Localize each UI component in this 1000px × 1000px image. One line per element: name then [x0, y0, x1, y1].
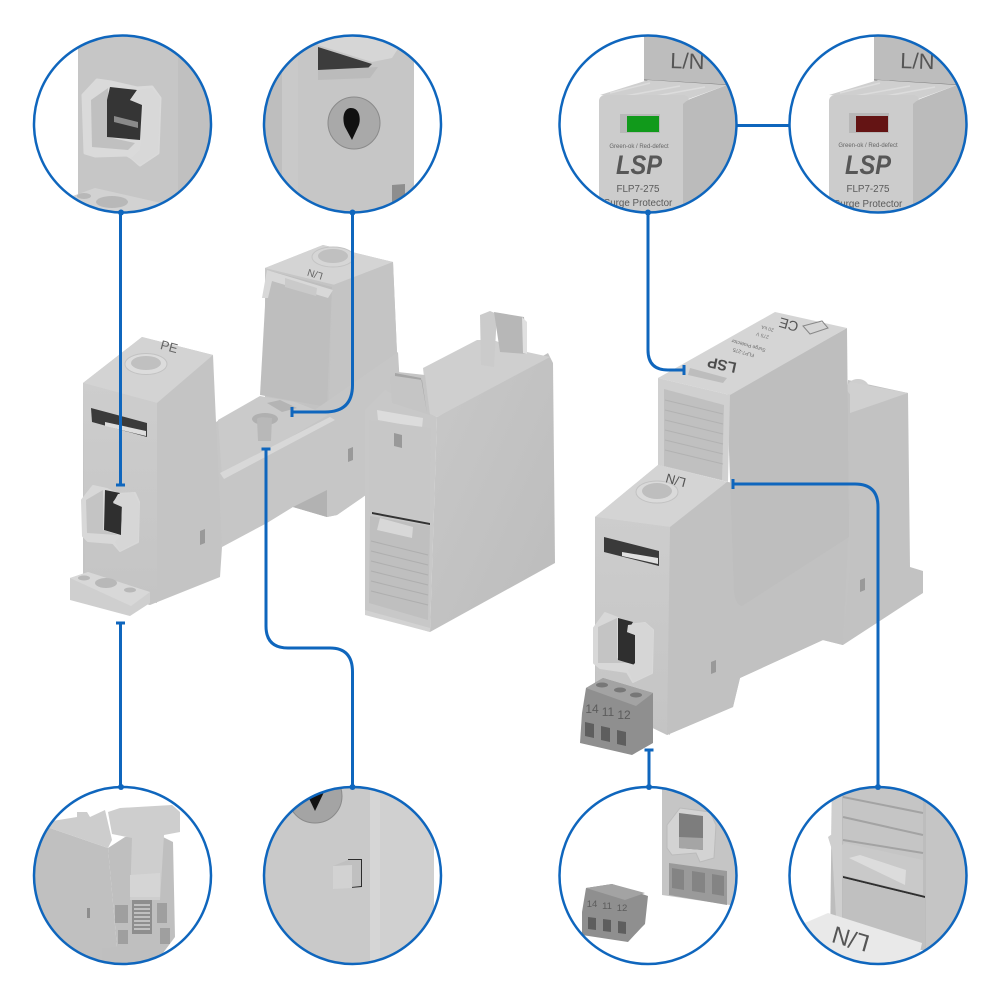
- connector: tab circle to base: [262, 449, 352, 787]
- callout circle: connector clip detail: [73, 36, 210, 212]
- slot opening: [318, 37, 398, 80]
- mounting plate edge: [73, 188, 160, 211]
- indicator caption: Green-ok / Red-defect: [609, 144, 669, 150]
- connector junction dots: [118, 210, 881, 790]
- plug: [582, 884, 648, 942]
- status window: red: [849, 113, 889, 133]
- spring: [132, 900, 152, 934]
- flap label: L/N: [670, 48, 705, 74]
- callout circle: green indicator window: [599, 36, 736, 212]
- model text: FLP7-275: [846, 184, 890, 195]
- plug: 11: [602, 901, 612, 912]
- connector: plate to spring circle: [116, 623, 125, 787]
- socket: [667, 808, 727, 905]
- terminal connector: 14: [585, 702, 599, 716]
- product: open base with removed cartridge: [70, 245, 555, 632]
- keyhole fragment: [292, 789, 342, 824]
- callout circle: plug connector and socket: [582, 788, 740, 942]
- cartridge: Surge Protector: [731, 337, 766, 353]
- socket: [82, 486, 139, 551]
- latch mechanism: [102, 805, 180, 970]
- callout circle: side tab detail: [265, 788, 434, 963]
- cartridge: [658, 312, 849, 606]
- status window: green: [620, 114, 660, 133]
- terminal connector: [580, 678, 653, 755]
- ribs: [842, 796, 924, 854]
- white label panel: [805, 913, 922, 963]
- white label panel: L/N: [829, 920, 873, 956]
- terminal connector: 12: [617, 708, 631, 722]
- cartridge: CE: [777, 314, 800, 335]
- PE terminal block: PE: [159, 337, 180, 356]
- callout circle: red indicator window: Surge Protector: [834, 199, 903, 210]
- terminal connector: 11: [602, 705, 615, 719]
- connector: green and red circles: [736, 124, 790, 127]
- LSP logo: LSP: [845, 150, 892, 180]
- cartridge: FLP7-275: [732, 346, 755, 358]
- socket: [594, 613, 653, 682]
- PE terminal block: [82, 337, 222, 605]
- connector: keyhole circle to bar slot: [292, 212, 352, 417]
- cartridge: 275 V: [755, 330, 770, 340]
- connector: green circle to cartridge: [648, 212, 684, 375]
- plug: 12: [617, 903, 627, 914]
- flap label: L/N: [900, 48, 935, 74]
- cartridge: 20 kA: [760, 323, 775, 333]
- connector: clip circle to socket: [116, 212, 125, 485]
- callout circle: green indicator window: Surge Protector: [604, 198, 673, 209]
- clip socket: [83, 80, 160, 165]
- removed surge cartridge: [365, 311, 555, 632]
- tab: [333, 859, 362, 889]
- indicator caption: Green-ok / Red-defect: [838, 143, 898, 149]
- callout circle: red indicator window: [829, 36, 966, 212]
- callout connectors: [116, 126, 878, 787]
- base module rear L/N block: L/N: [306, 266, 324, 281]
- model text: FLP7-275: [616, 184, 660, 195]
- base body: [594, 465, 865, 735]
- connector: latch circle to cartridge: [733, 479, 878, 787]
- connector: plug circle to connector: [644, 750, 654, 787]
- callout circle: spring latch detail: [30, 805, 180, 970]
- plug: 14: [587, 899, 597, 910]
- callout circle: keyhole detail: [265, 36, 414, 212]
- LSP logo: LSP: [616, 150, 663, 180]
- base body: L/N: [664, 470, 688, 490]
- latch tab: [842, 843, 925, 898]
- base module connecting bar: [216, 352, 405, 547]
- product: assembled surge protector: [580, 312, 923, 755]
- cartridge: LSP: [706, 353, 738, 376]
- base mounting plate: [70, 572, 150, 616]
- base module rear L/N block: [260, 245, 398, 517]
- callout circle: ribbed cover latch: [805, 788, 966, 963]
- rear base section: [823, 379, 923, 645]
- keyhole: [328, 97, 380, 149]
